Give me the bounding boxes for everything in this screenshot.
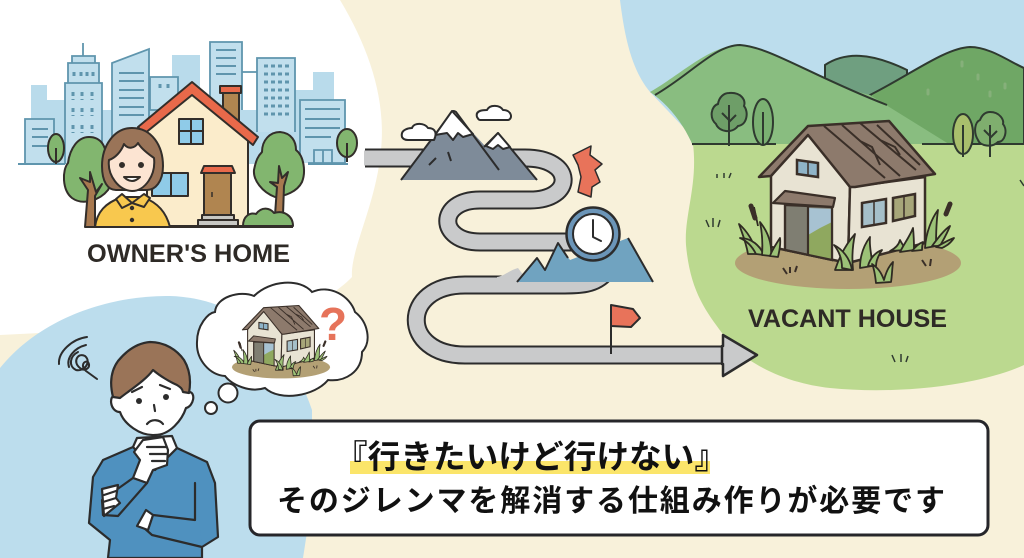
- icon: thought house: [232, 306, 330, 378]
- callout line 2: そのジレンマを解消する仕組み作りが必要です: [277, 484, 945, 518]
- horizon lines: [692, 143, 1024, 145]
- crossed arm: [102, 478, 147, 516]
- road with arrow: [364, 158, 757, 376]
- panel: rural landscape: [650, 45, 1024, 390]
- road surface: [364, 158, 730, 355]
- icon: worried man: [89, 342, 218, 558]
- panel: rural background: [620, 0, 1024, 150]
- panel: owner's home background: [0, 0, 382, 335]
- hand at chin: [133, 437, 168, 483]
- faint hill trees: [928, 62, 1005, 96]
- label: vacant house: VACANT HOUSE: [748, 305, 947, 333]
- clock: [566, 208, 620, 260]
- icon: trees in the field: [712, 93, 1005, 157]
- icon: red barrier burst: [573, 146, 602, 197]
- label: owner's home: OWNER'S HOME: [87, 240, 290, 268]
- icon: smiling woman owner: [95, 128, 170, 227]
- icon: city skyline: [18, 42, 348, 164]
- icon: goal flag: [611, 305, 640, 354]
- icon: vacant house: [735, 121, 961, 289]
- icon: blue mountain with clock: [517, 208, 653, 282]
- icon: mountains with snow and clouds: [401, 106, 537, 180]
- sweater: [89, 447, 218, 558]
- grass marks: [706, 173, 1024, 362]
- arrow head: [722, 335, 757, 376]
- face: [111, 360, 193, 435]
- road bump: [497, 268, 524, 282]
- panel: worried owner background: [0, 296, 312, 558]
- question mark: ?: [319, 298, 347, 350]
- highlight: [350, 461, 710, 474]
- callout line 1: 『行きたいけど行けない』: [335, 439, 727, 475]
- road outline: [365, 158, 725, 355]
- icon: owner's house: [138, 82, 293, 227]
- icon: garden trees: [48, 129, 357, 227]
- neck: [133, 436, 177, 470]
- icon: confusion spiral: [59, 337, 97, 379]
- hair: [111, 342, 190, 398]
- callout box: [250, 421, 988, 535]
- thought bubble: [197, 283, 368, 414]
